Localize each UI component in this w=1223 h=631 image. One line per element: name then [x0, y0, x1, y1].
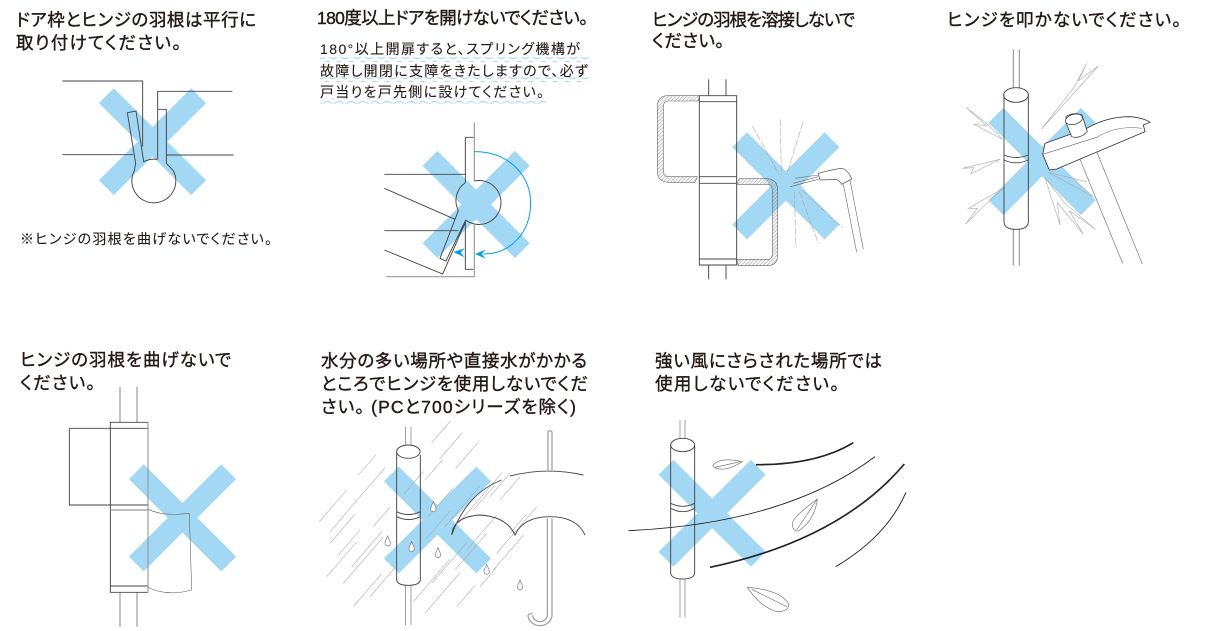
panel: avoid strong wind — [628, 351, 906, 618]
cross mark — [430, 158, 522, 251]
pin lines — [680, 420, 685, 618]
cross mark — [391, 474, 484, 566]
hinge leaves with hatching — [657, 96, 699, 182]
hinge knuckle — [456, 180, 501, 224]
heading: avoid water exposure: さい。 (PCと700シリーズを除く) — [321, 397, 576, 417]
hinge cylinder — [397, 445, 420, 585]
heading: do not open past 180 degrees: 180度以上ドアを開けないでください。 — [317, 8, 588, 28]
welding torch — [818, 168, 852, 184]
pin lines — [120, 387, 137, 627]
explanation text with wavy underline: 戸当りを戸先側に設けてください。 — [320, 84, 544, 100]
note: do not bend leaves: ※ヒンジの羽根を曲げないでください。 — [20, 231, 272, 247]
illustration: door opened past 180 degrees — [384, 123, 531, 277]
pin lines — [1013, 49, 1019, 266]
heading: avoid strong wind: 強い風にさらされた場所では — [655, 351, 882, 371]
hinge body — [699, 79, 737, 279]
heading: do not weld leaves: ヒンジの羽根を溶接しないで — [652, 10, 855, 30]
pin lines — [406, 427, 411, 625]
door frame lines — [62, 81, 234, 163]
heading: avoid water exposure: ところでヒンジを使用しないでくだ — [321, 374, 588, 394]
heading: do not weld leaves — [652, 10, 855, 51]
water drops — [385, 502, 523, 590]
leaves — [713, 460, 817, 612]
heading: do not bend leaves: ください。 — [20, 373, 95, 393]
impact bursts — [962, 63, 1098, 234]
heading: keep leaves parallel — [16, 10, 256, 53]
hinge leaves and door — [384, 137, 473, 274]
panel: keep leaves parallel — [16, 10, 272, 247]
panel: do not hit the hinge — [947, 10, 1181, 266]
bent right leaf — [148, 509, 192, 593]
panel: do not bend leaves — [20, 350, 231, 627]
heading: do not bend leaves: ヒンジの羽根を曲げないで — [20, 350, 231, 370]
heading: avoid strong wind: 使用しないでください。 — [655, 374, 839, 394]
heading: avoid strong wind — [655, 351, 882, 394]
hinge body and left leaf — [69, 422, 148, 592]
illustration: hinge in the rain with umbrella — [319, 421, 585, 626]
panel: do not open past 180 degrees — [317, 8, 589, 277]
illustration: welding torch on hinge — [657, 79, 863, 279]
arrowheads — [453, 248, 486, 259]
illustration: bent hinge leaf in plan view — [62, 81, 234, 203]
cross mark — [136, 472, 229, 564]
hinge knuckle and bent leaf — [127, 111, 176, 203]
cross mark — [666, 467, 758, 559]
cross mark — [740, 140, 832, 232]
illustration: bent leaf on hinge — [69, 387, 229, 627]
umbrella — [452, 431, 585, 626]
hinge cylinder — [1004, 88, 1028, 229]
wall and stop lines — [386, 123, 474, 277]
cross mark — [996, 115, 1088, 208]
heading: avoid water exposure: 水分の多い場所や直接水がかかる — [321, 351, 587, 371]
heading: do not weld leaves: ください。 — [652, 31, 724, 51]
heading: keep leaves parallel: ドア枠とヒンジの羽根は平行に — [16, 10, 256, 30]
blue opening arc — [474, 152, 531, 254]
hammer head — [1043, 117, 1150, 170]
hinge cylinder — [671, 438, 695, 579]
wind lines — [710, 443, 904, 567]
illustration: hinge in strong wind — [628, 420, 906, 618]
heading: keep leaves parallel: 取り付けてください。 — [16, 33, 181, 53]
heading: avoid water exposure — [321, 351, 588, 417]
heading: do not bend leaves — [20, 350, 231, 393]
panel: avoid water exposure — [319, 351, 588, 626]
sparks — [752, 119, 843, 247]
explanation text with wavy underline — [320, 41, 589, 104]
panel: do not weld leaves — [652, 10, 863, 279]
explanation text with wavy underline: 故障し開閉に支障をきたしますので、必ず — [320, 63, 589, 79]
illustration: hammer striking hinge — [962, 49, 1150, 266]
cross mark — [106, 96, 199, 188]
hammer handle — [1080, 152, 1142, 264]
rain lines — [319, 421, 537, 613]
explanation text with wavy underline: 180°以上開扉すると、スプリング機構が — [320, 41, 580, 57]
heading: do not hit the hinge: ヒンジを叩かないでください。 — [947, 10, 1181, 30]
